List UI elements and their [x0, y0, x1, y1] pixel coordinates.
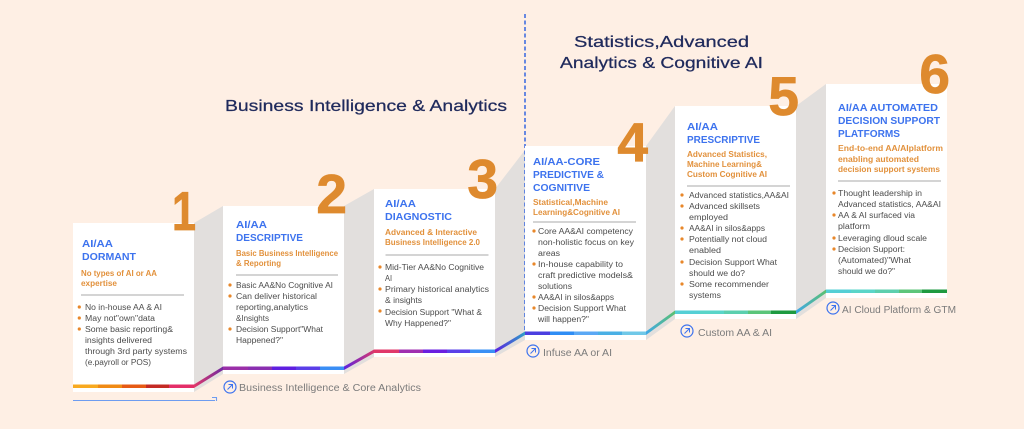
- stage 2 bullet list: Decision Support"What: [236, 325, 324, 334]
- label: Custom AA & AI: [681, 325, 772, 339]
- stage 3 title: [385, 198, 452, 223]
- icon: arrow circle: [224, 381, 236, 393]
- stage 5 bullet list: enabled: [689, 246, 721, 255]
- stage 2 bullet list: Happened?": [236, 336, 283, 345]
- stage 3 title: DIAGNOSTIC: [385, 211, 452, 223]
- stage 3 bullet list: Mid-Tier AA&No Cognitive: [385, 263, 485, 272]
- stage 2 bullet list: Basic AA&No Cognitive AI: [236, 281, 333, 290]
- stage 1 bullet list: insights delivered: [85, 336, 152, 345]
- stage 5 title: AI/AA: [687, 121, 718, 133]
- heading: Business Intelligence & Analytics: Business Intelligence & Analytics: [225, 98, 507, 115]
- stage 4 subtitle: Statistical,Machine: [533, 198, 609, 207]
- stage 6 gradient stripe: [826, 290, 947, 293]
- heading: Statistics, Advanced Analytics & Cognitive AI: Statistics,Advanced: [574, 34, 749, 51]
- stage 6 subtitle: enabling automated: [838, 155, 919, 164]
- stage 4 bullet list: AA&AI in silos&apps: [538, 293, 614, 302]
- section divider: dashed line: [524, 14, 526, 333]
- stage 5 bullet list: Advanced skillsets: [689, 202, 760, 211]
- stage 6 bullet list: Leveraging dloud scale: [838, 234, 928, 243]
- stage 4 title: COGNITIVE: [533, 182, 590, 194]
- stage 6 title: PLATFORMS: [838, 128, 900, 140]
- stage 2 title: [236, 219, 303, 244]
- stage 6 bullet list: Advanced statistics, AA&AI: [838, 200, 941, 209]
- number 4: 4: [617, 111, 648, 173]
- stage 5 subtitle: [687, 150, 767, 179]
- label: Infuse AA or AI: Infuse AA or AI: [543, 348, 612, 359]
- number 1: 1: [172, 180, 196, 242]
- stage 4 gradient stripe: [525, 332, 646, 335]
- stage 5 subtitle: Machine Learning&: [687, 160, 762, 169]
- stage 5 bullet list: Some recommender: [689, 280, 769, 289]
- stage 5 gradient stripe: [675, 310, 796, 314]
- stage 6 bullet list: Decision Support:: [838, 245, 905, 254]
- label: Custom AA & AI: Custom AA & AI: [698, 328, 772, 339]
- stage 2 gradient stripe: [223, 366, 344, 370]
- stage 5 bullet list: should we do?: [689, 269, 746, 278]
- label: AI Cloud Platform & GTM: [827, 302, 956, 316]
- stage 4 title: AI/AA-CORE: [533, 156, 600, 168]
- stage 5 bullet list: systems: [689, 291, 721, 300]
- stage 3 bullet list: [378, 263, 489, 328]
- heading: Statistics, Advanced Analytics & Cognitive AI: [560, 34, 763, 72]
- stage 2 bullet list: reporting,analytics: [236, 303, 308, 312]
- stage 3 subtitle: [385, 228, 481, 247]
- stage 5 bullet list: Potentially not cloud: [689, 235, 767, 244]
- stage 2 subtitle: [236, 249, 339, 268]
- stage 4 bullet list: will happen?": [537, 315, 589, 324]
- stage 5 bullet list: [680, 191, 789, 300]
- stage 3 title: AI/AA: [385, 198, 416, 210]
- stage 1 bullet list: through 3rd party systems: [85, 347, 187, 356]
- stage 5 subtitle: Advanced Statistics,: [687, 150, 767, 159]
- number 5: 5: [768, 65, 799, 127]
- stage 3 bullet list: Why Happened?": [385, 319, 451, 328]
- panel: stage 6 automated decision support platforms: [826, 43, 950, 298]
- label: AI Cloud Platform & GTM: AI Cloud Platform & GTM: [842, 305, 956, 316]
- stage 6 bullet list: (Automated)"What: [838, 256, 912, 265]
- stage 1 bullet list: (e.payroll or POS): [85, 358, 151, 367]
- icon: arrow circle: [681, 325, 693, 337]
- stage 5 bullet list: AA&AI in silos&apps: [689, 224, 765, 233]
- stage 6 subtitle: End-to-end AA/AIplatform: [838, 144, 943, 153]
- heading: Statistics, Advanced Analytics & Cognitive AI: Analytics & Cognitive AI: [560, 55, 763, 72]
- icon: arrow circle: [527, 345, 539, 357]
- connector stripe 1 to 2: [194, 366, 223, 388]
- stage 1 subtitle: No types of AI or AA: [81, 269, 157, 278]
- number 6: 6: [919, 43, 950, 105]
- stage 5 subtitle: Custom Cognitive AI: [687, 170, 767, 179]
- stage 4 subtitle: Learning&Cognitive AI: [533, 208, 620, 217]
- stage 2 title: DESCRIPTIVE: [236, 232, 303, 244]
- stage 6 bullet list: AA & AI surfaced via: [838, 211, 916, 220]
- label: Business Intelligence & Core Analytics: Business Intelligence & Core Analytics: [239, 383, 421, 394]
- label: Infuse AA or AI: [527, 345, 612, 359]
- stage 5 title: [687, 121, 760, 146]
- stage 2 bullet list: Can deliver historical: [236, 292, 317, 301]
- stage 5 bullet list: employed: [689, 213, 728, 222]
- stage 1 gradient stripe: [73, 384, 194, 388]
- stage 1 bullet list: Some basic reporting&: [85, 325, 174, 334]
- stage 1 subtitle: expertise: [81, 279, 118, 288]
- stage 6 title: AI/AA AUTOMATED: [838, 102, 938, 114]
- stage 2 title: AI/AA: [236, 219, 267, 231]
- connector stripe 3 to 4: [495, 332, 525, 353]
- stage 4 title: [533, 156, 604, 194]
- panel: stage 3 diagnostic: [374, 148, 498, 357]
- number 2: 2: [316, 163, 347, 225]
- stage 1 subtitle: [81, 269, 157, 288]
- stage 6 title: DECISION SUPPORT: [838, 115, 941, 127]
- stage 4 bullet list: craft predictive models&: [538, 271, 634, 280]
- panel: stage 2 descriptive: [223, 163, 347, 374]
- stage 1 title: [82, 238, 137, 263]
- stage 3 gradient stripe: [374, 350, 495, 353]
- stage 6 bullet list: [832, 189, 941, 276]
- stage 2 bullet list: [228, 281, 333, 345]
- stage 4 bullet list: non-holistic focus on key: [538, 238, 634, 247]
- baseline arrow: [73, 398, 216, 401]
- stage 3 bullet list: Decision Support "What &: [385, 308, 483, 317]
- stage 4 bullet list: Core AA&AI competency: [538, 227, 633, 236]
- panel: stage 5 prescriptive: [675, 65, 799, 319]
- stage 1 title: DORMANT: [82, 251, 137, 263]
- connector stripe 4 to 5: [646, 310, 675, 335]
- stage 2 subtitle: Basic Business Intelligence: [236, 249, 339, 258]
- stage 4 bullet list: [532, 227, 634, 324]
- panel: stage 4 core predictive and cognitive: [525, 111, 648, 340]
- stage 5 bullet list: Advanced statistics,AA&AI: [689, 191, 789, 200]
- stage 4 subtitle: [533, 198, 620, 217]
- stage 3 subtitle: Business Intelligence 2.0: [385, 238, 481, 247]
- connector stripe 2 to 3: [344, 350, 374, 370]
- stage 4 title: PREDICTIVE &: [533, 169, 604, 181]
- stage 4 bullet list: areas: [538, 249, 560, 258]
- stage 6 subtitle: [838, 144, 943, 174]
- stage 6 bullet list: should we do?": [838, 267, 895, 276]
- stage 5 bullet list: Decision Support What: [689, 258, 778, 267]
- stage 6 bullet list: platform: [838, 222, 870, 231]
- stage 3 bullet list: Primary historical analytics: [385, 285, 489, 294]
- stage 1 bullet list: May not"own"data: [85, 314, 156, 323]
- stage 1 title: AI/AA: [82, 238, 113, 250]
- stage 2 bullet list: &Insights: [236, 314, 269, 323]
- stage 4 bullet list: solutions: [538, 282, 572, 291]
- stage 1 bullet list: No in-house AA & AI: [85, 303, 162, 312]
- stage 2 subtitle: & Reporting: [236, 259, 281, 268]
- stage 3 bullet list: AI: [385, 274, 392, 283]
- stage 3 subtitle: Advanced & Interactive: [385, 228, 478, 237]
- stage 4 bullet list: In-house capability to: [538, 260, 624, 269]
- connector stripe 5 to 6: [796, 290, 826, 314]
- stage 1 bullet list: [78, 303, 187, 367]
- panel: stage 1 dormant: [73, 180, 196, 392]
- step side walls: [194, 84, 826, 392]
- stage 3 bullet list: & insights: [385, 296, 422, 305]
- stage 6 subtitle: decision support systems: [838, 165, 941, 174]
- stage 6 bullet list: Thought leadership in: [838, 189, 922, 198]
- number 3: 3: [467, 148, 498, 210]
- stage 4 bullet list: Decision Support What: [538, 304, 627, 313]
- stage 6 title: [838, 102, 941, 140]
- stage 5 title: PRESCRIPTIVE: [687, 134, 760, 146]
- icon: arrow circle: [827, 302, 839, 314]
